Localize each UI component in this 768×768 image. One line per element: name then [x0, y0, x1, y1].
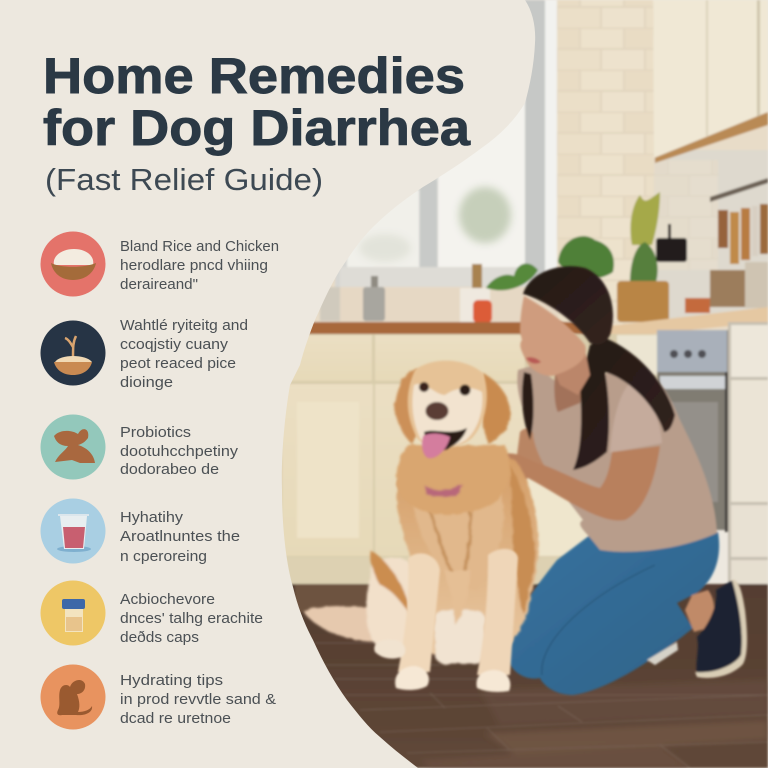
- item 4 text: Aroatlnuntes the: [120, 528, 240, 545]
- title: [43, 48, 471, 156]
- item 3 text: [120, 424, 239, 478]
- leafy plant: [558, 236, 614, 279]
- upper cabinets: [653, 0, 768, 163]
- subtitle: (Fast Relief Guide): [45, 162, 323, 197]
- item 4 text: n cperoreing: [120, 548, 207, 565]
- photo: kitchen background: [275, 0, 768, 768]
- item 6 text: [120, 672, 276, 727]
- photo: golden retriever: [303, 455, 538, 664]
- ears: [395, 368, 421, 445]
- brick wall: [557, 0, 654, 240]
- item 5 text: [120, 591, 263, 646]
- shirt: [517, 357, 717, 552]
- hanging utensils: [685, 178, 768, 313]
- lower cabinets: [275, 334, 660, 584]
- back foot sole: [647, 642, 678, 665]
- icon: sitting dog: [40, 664, 106, 730]
- hind body: [366, 557, 425, 654]
- item 3 text: dootuhcchpetiny: [120, 443, 239, 460]
- arm and hand: [474, 446, 660, 521]
- countertop: [300, 322, 610, 334]
- item 4 text: Hyhatihy: [120, 509, 184, 526]
- belly: [435, 610, 485, 664]
- neck ruff: [397, 445, 510, 515]
- item 5: activated charcoal: [40, 580, 263, 646]
- neck: [553, 350, 590, 395]
- wicker basket: [617, 281, 669, 322]
- item 5 text: deðds caps: [120, 629, 199, 646]
- item 2 text: [120, 317, 248, 391]
- window: [335, 0, 557, 288]
- black pan: [656, 238, 687, 262]
- right drawers: [728, 322, 768, 614]
- photo: woman kneeling: [474, 266, 747, 695]
- french press: [363, 287, 385, 321]
- small plant on sill: [486, 263, 538, 290]
- item 2 text: ccoqjstiy cuany: [120, 336, 229, 353]
- jeans: [505, 532, 719, 695]
- icon: rice bowl: [40, 232, 106, 296]
- item 1 text: herodlare pncd vhiing: [120, 257, 268, 274]
- eyes: [419, 382, 429, 392]
- head: [408, 361, 487, 448]
- item 5 text: dnces' talhg erachite: [120, 610, 263, 627]
- item 1 text: Bland Rice and Chicken: [120, 238, 279, 255]
- back arm: [515, 428, 553, 477]
- hair crown: [523, 266, 613, 344]
- item 3 text: Probiotics: [120, 424, 191, 441]
- tongue: [422, 433, 450, 458]
- item 3: probiotics: [40, 414, 239, 480]
- mouth: [424, 428, 467, 453]
- item 6 text: dcad re uretnoe: [120, 710, 231, 727]
- left hair strand: [522, 372, 534, 440]
- item 1: bland rice and chicken: [40, 232, 279, 296]
- cup with orange: [460, 288, 490, 323]
- icon: cup with blue lid: [40, 580, 106, 646]
- cream curved text panel: [0, 0, 535, 768]
- tail: [303, 606, 378, 642]
- counter items: [320, 192, 687, 323]
- tall plant: [630, 192, 660, 245]
- icon: sprouting bowl: [40, 320, 106, 386]
- sneaker: [697, 580, 746, 677]
- backsplash: [335, 287, 557, 323]
- collar: [425, 484, 462, 497]
- face: [520, 296, 586, 376]
- item 2 text: peot reaced pice: [120, 355, 236, 372]
- item 6 text: Hydrating tips: [120, 672, 223, 689]
- item 2 text: dioinge: [120, 374, 173, 391]
- item 4: hydration: [40, 498, 240, 565]
- icon: dog: [40, 414, 106, 480]
- icon: glass of water: [40, 498, 106, 564]
- title: for Dog Diarrhea: [43, 100, 471, 156]
- item 6 text: in prod revvtle sand &: [120, 691, 276, 708]
- item 1 text: [120, 238, 279, 293]
- front legs: [398, 553, 440, 672]
- item 2: white rice: [40, 317, 248, 391]
- ankle: [685, 590, 714, 632]
- item 4 text: [120, 509, 240, 565]
- paws: [395, 666, 429, 690]
- item 2 text: Wahtlé ryiteitg and: [120, 317, 248, 334]
- item 1 text: deraireand": [120, 276, 198, 293]
- nose: [426, 402, 448, 420]
- title: Home Remedies: [43, 48, 465, 104]
- tile floor: [275, 584, 768, 768]
- item 5 text: Acbiochevore: [120, 591, 215, 608]
- item 3 text: dodorabeo de: [120, 461, 219, 478]
- torso and chest: [397, 455, 538, 655]
- oven: [657, 330, 729, 532]
- item 6: hydrating tips: [40, 664, 276, 730]
- lips: [526, 357, 541, 364]
- long dark hair: [573, 338, 675, 470]
